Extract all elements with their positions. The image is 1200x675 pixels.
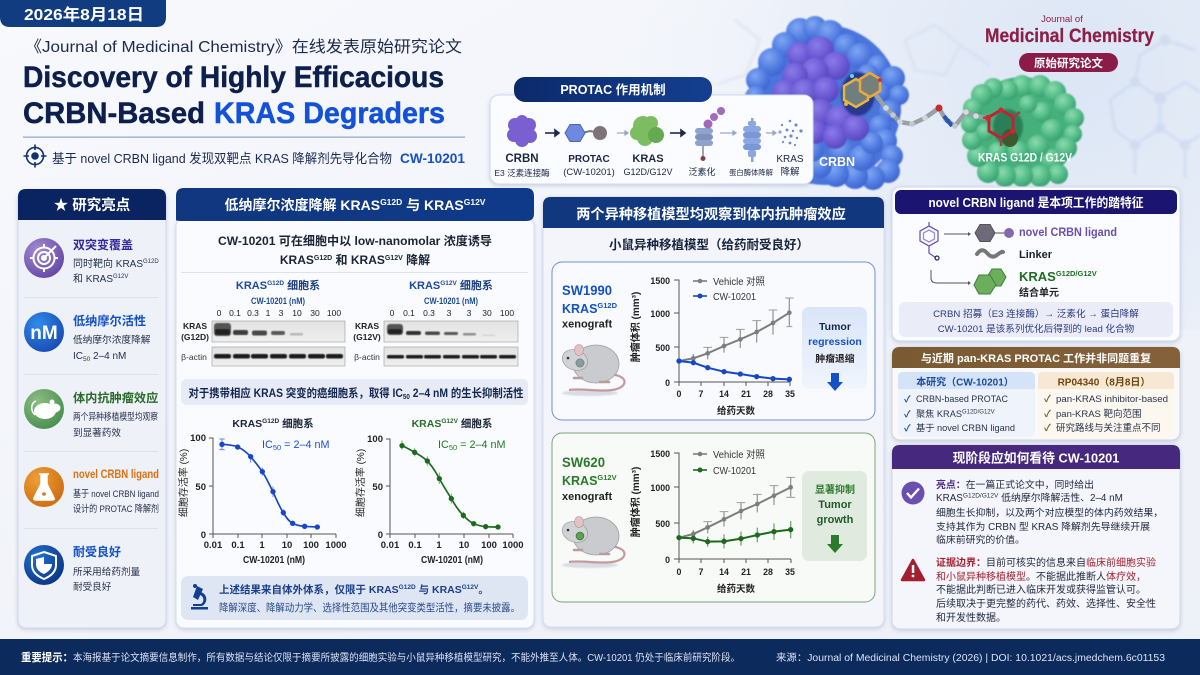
dose-response chart: G12D: KRAS xyxy=(232,418,262,430)
column: this study: G12D/G12V xyxy=(962,410,995,416)
dose-response chart: G12D: 0 xyxy=(201,530,206,541)
heading: degradation: G12V xyxy=(464,197,486,207)
highlights text: KRAS xyxy=(936,493,963,504)
heading: current stage: 现阶段应如何看待 CW-10201 xyxy=(953,450,1119,466)
mechanism labels: E3 泛素连接酶 xyxy=(494,168,550,178)
line chart: SW620 xyxy=(629,448,795,595)
in vitro scope note: 与 KRAS xyxy=(416,583,462,596)
evidence boundary text: 不能据此判断已进入临床开发或获得监管认可。 xyxy=(936,583,1146,596)
illustration: mouse xyxy=(559,344,624,396)
western blot: G12V: 0.1 xyxy=(403,308,415,318)
line chart: SW1990: 给药天数 xyxy=(717,405,755,417)
card: SW620 xyxy=(552,433,875,602)
evidence boundary text: 后续取决于更完整的药代、药效、选择性、安全性 xyxy=(936,597,1156,610)
3D structure: KRAS surface xyxy=(961,75,1084,187)
highlight 1: dual mutation coverage: G12V xyxy=(113,274,128,280)
column: RP04340: RP04340（8月8日） xyxy=(1058,376,1150,388)
date tab xyxy=(0,0,166,27)
icon: shield xyxy=(24,545,64,585)
western blot: G12D: 10 xyxy=(292,308,302,318)
model label: KRAS xyxy=(562,302,597,316)
main title xyxy=(23,61,445,130)
dose-response chart: G12D xyxy=(177,417,347,566)
dose-response chart: G12D: 细胞系 xyxy=(279,417,314,430)
line chart: SW1990: 1500 xyxy=(650,276,670,286)
column: RP04340: 研究路线与关注重点不同 xyxy=(1056,422,1161,434)
western blot: G12D: 细胞系 xyxy=(284,278,320,292)
column: this study: CRBN-based PROTAC xyxy=(916,394,1008,404)
line chart: SW620: 14 xyxy=(719,567,729,577)
dose-response chart: G12V: 1 xyxy=(436,540,442,551)
mechanism labels: CRBN xyxy=(505,153,539,165)
western blot: G12D: 0.3 xyxy=(247,308,259,318)
mechanism note xyxy=(899,302,1173,337)
dose-response chart: G12V xyxy=(354,417,524,566)
card: SW1990 xyxy=(552,262,875,420)
main title: CRBN-Based xyxy=(23,97,205,130)
heading: degradation xyxy=(176,188,534,221)
western blot: G12D: (G12D) xyxy=(181,332,209,342)
line chart: SW620: 肿瘤体积 (mm³) xyxy=(629,467,642,537)
column: RP04340 xyxy=(1038,372,1174,437)
badge: original paper xyxy=(1019,53,1118,72)
mechanism note: CRBN 招募（E3 连接酶）→ 泛素化 → 蛋白降解 xyxy=(933,308,1139,320)
icon: target xyxy=(24,144,46,168)
date tab: 2026年8月18日 xyxy=(24,5,144,24)
degradation summary: 和 KRAS xyxy=(332,252,385,267)
western blot: G12D: KRAS xyxy=(183,321,207,331)
in vitro scope note: G12V xyxy=(462,584,479,591)
mechanism labels: G12D/G12V xyxy=(623,167,673,177)
western blot: G12V: 30 xyxy=(482,308,492,318)
highlight 4: novel CRBN ligand xyxy=(24,467,159,515)
growth inhibition callout: 2–4 nM 的生长抑制活性 xyxy=(410,386,524,400)
icon: mouse xyxy=(24,389,64,429)
panel: comparison with pan-KRAS PROTAC xyxy=(892,347,1180,440)
dose-response chart: G12V: IC xyxy=(438,439,449,451)
journal announcement line: 《Journal of Medicinal Chemistry》在线发表原始研究论文 xyxy=(25,38,462,56)
highlight 2: low nanomolar activity: 低纳摩尔浓度降解 xyxy=(73,333,151,346)
highlight 5: well tolerated: 耐受良好 xyxy=(73,581,112,593)
western blot: G12V: β-actin xyxy=(354,352,380,362)
highlights text xyxy=(902,478,1163,546)
mechanism note: CW-10201 是该系列优化后得到的 lead 化合物 xyxy=(938,323,1135,335)
western blot: G12V: (G12V) xyxy=(353,332,381,342)
western blot: G12V: 100 xyxy=(500,308,514,318)
diagram labels: novel CRBN ligand xyxy=(1019,227,1117,239)
degradation summary: CW-10201 可在细胞中以 low-nanomolar 浓度诱导 xyxy=(218,233,492,248)
column: this study: 本研究（CW-10201） xyxy=(916,376,1014,388)
model label: SW620 xyxy=(562,454,605,470)
line chart: SW620: 28 xyxy=(763,567,773,577)
legend: Vehicle 对照 xyxy=(713,448,765,461)
highlight 1: dual mutation coverage: 和 KRAS xyxy=(73,274,113,285)
evidence boundary text: 和小鼠异种移植模型。不能据此推断人体疗效， xyxy=(936,570,1146,583)
in vitro scope note xyxy=(181,576,528,620)
highlight 1: dual mutation coverage: 同时靶向 KRAS xyxy=(73,259,143,270)
background molecular network xyxy=(715,20,1200,178)
model label: G12V xyxy=(597,473,617,482)
dose-response chart: G12V: = 2–4 nM xyxy=(457,439,505,451)
icon: CRBN blob xyxy=(507,115,537,147)
model label: xenograft xyxy=(562,318,612,330)
western blot: G12D: 0 xyxy=(217,308,222,318)
highlight 2: low nanomolar activity: 低纳摩尔活性 xyxy=(73,313,146,328)
western blot: G12V: CW-10201 (nM) xyxy=(424,296,478,306)
icon: flask xyxy=(24,467,64,507)
dose-response chart: G12V: 0.1 xyxy=(408,540,422,551)
western blot: G12D: 30 xyxy=(310,308,320,318)
icon: degraded fragments xyxy=(778,120,803,146)
dose-response chart: G12D: CW-10201 (nM) xyxy=(243,555,305,566)
icon: target xyxy=(24,238,64,278)
column: RP04340: ✓ xyxy=(1044,409,1051,420)
dose-response chart: G12D: = 2–4 nM xyxy=(281,439,329,451)
arrow: down xyxy=(827,535,843,553)
heading: degradation: 低纳摩尔浓度降解 KRAS xyxy=(225,197,380,213)
highlight 5: well tolerated xyxy=(24,544,141,593)
model label: G12D xyxy=(597,301,618,310)
column: RP04340: pan-KRAS 靶向范围 xyxy=(1056,408,1142,420)
growth inhibition callout: 对于携带相应 KRAS 突变的癌细胞系，取得 IC xyxy=(188,388,426,400)
subtitle with target icon: CW-10201 xyxy=(400,151,465,166)
panel: degradation at low nanomolar concentration xyxy=(176,188,534,628)
heading: comparison: 与近期 pan-KRAS PROTAC 工作并非同题重复 xyxy=(921,351,1151,365)
highlight 4: novel CRBN ligand: novel CRBN ligand xyxy=(73,469,159,481)
evidence boundary text: 证据边界：目前可核实的信息来自临床前细胞实验 xyxy=(936,556,1156,569)
highlight 2: low nanomolar activity: 50 xyxy=(83,356,91,363)
callout: tumor regression: 肿瘤退缩 xyxy=(815,352,855,365)
arrow xyxy=(545,130,559,136)
line chart: SW620: 7 xyxy=(699,567,704,577)
heading: current stage xyxy=(892,445,1180,469)
diagram: molecule schematic xyxy=(920,222,1014,294)
column: RP04340: pan-KRAS inhibitor-based xyxy=(1056,394,1168,405)
line chart: SW620: 21 xyxy=(741,567,751,577)
western blot: G12V: G12V xyxy=(440,280,458,287)
western blot: G12D: 3 xyxy=(279,308,284,318)
western blot: G12V: 细胞系 xyxy=(457,278,493,292)
callout: tumor growth suppression: 显著抑制 xyxy=(815,483,855,496)
arrow xyxy=(720,131,736,135)
heading: feature xyxy=(895,190,1177,214)
dose-response chart: G12V: CW-10201 (nM) xyxy=(421,555,483,566)
dose-response chart: G12D: 细胞存活率 (%) xyxy=(177,449,190,517)
model label: xenograft xyxy=(562,491,612,503)
callout: tumor regression: Tumor xyxy=(819,321,851,333)
highlight 1: dual mutation coverage: G12D xyxy=(143,259,159,265)
dose-response chart: G12V: 细胞存活率 (%) xyxy=(354,449,367,517)
model label xyxy=(562,454,617,503)
line chart: SW1990 xyxy=(629,275,795,417)
western blot: G12V: KRAS xyxy=(355,321,379,331)
line chart: SW620: 1500 xyxy=(650,449,670,459)
in vitro scope note: G12D xyxy=(399,584,416,591)
subtitle with target icon xyxy=(24,144,465,168)
heading: degradation: G12D xyxy=(380,197,402,207)
highlight 3: in vivo antitumor effect: 体内抗肿瘤效应 xyxy=(73,390,158,405)
footer xyxy=(0,639,1200,675)
dose-response chart: G12D: 50 xyxy=(195,482,206,493)
dose-response chart: G12V: 50 xyxy=(449,443,457,452)
footer: 本海报基于论文摘要信息制作，所有数据与结论仅限于摘要所披露的细胞实验与小鼠异种移植模型研究，不能外推至人体。CW-10201 仍处于临床前研究阶段。 xyxy=(73,651,740,664)
icon: check xyxy=(902,482,924,504)
icon: PROTAC xyxy=(565,124,607,142)
model label: KRAS xyxy=(562,474,597,488)
mechanism labels: KRAS xyxy=(632,153,664,165)
panel: research highlights xyxy=(18,189,166,628)
highlight 4: novel CRBN ligand: 基于 novel CRBN ligand xyxy=(73,488,159,500)
dose-response chart: G12D: 0.1 xyxy=(231,540,245,551)
journal logo xyxy=(985,14,1154,72)
line chart: SW620: 0 xyxy=(677,567,682,577)
dose-response chart: G12V: 100 xyxy=(481,540,497,551)
main title: KRAS Degraders xyxy=(214,97,445,130)
heading: highlights xyxy=(18,189,166,220)
western blot: G12V xyxy=(353,278,518,366)
heading: feature: novel CRBN ligand 是本项工作的踏特征 xyxy=(928,195,1144,210)
mechanism labels: 泛素化 xyxy=(688,166,716,177)
highlights text: 临床前研究的价值。 xyxy=(936,533,1025,546)
dose-response chart: G12D: G12D xyxy=(262,418,279,425)
heading: xenograft xyxy=(543,197,884,228)
western blot: G12V: 0 xyxy=(390,308,395,318)
badge: original paper: 原始研究论文 xyxy=(1034,56,1103,70)
diagram labels: 结合单元 xyxy=(1019,286,1059,299)
line chart: SW1990: 21 xyxy=(741,389,751,399)
subheading: mouse model: 小鼠异种移植模型（给药耐受良好） xyxy=(609,237,809,252)
diagram labels: G12D/G12V xyxy=(1056,269,1097,278)
dose-response chart: G12D: IC xyxy=(262,439,273,451)
3D structure: CRBN surface xyxy=(745,16,909,190)
legend: CW-10201 xyxy=(713,292,756,303)
heading: PROTAC xyxy=(514,77,712,102)
growth inhibition callout xyxy=(181,379,528,405)
panel: novel CRBN ligand feature xyxy=(892,187,1180,341)
callout: tumor growth suppression: growth xyxy=(817,514,854,526)
legend: Vehicle 对照 xyxy=(713,275,765,288)
dose-response chart: G12V: 0 xyxy=(378,530,383,541)
growth inhibition callout: 50 xyxy=(403,394,410,401)
mechanism labels xyxy=(494,153,804,178)
legend xyxy=(693,448,765,477)
western blot: G12V: 0.3 xyxy=(423,308,435,318)
column: this study: ✓ xyxy=(904,409,911,419)
western blot: G12D: G12D xyxy=(267,280,284,287)
western blot: G12D xyxy=(181,278,345,366)
journal logo: Journal of xyxy=(1041,14,1083,25)
evidence boundary text xyxy=(902,556,1156,624)
icon: microscope xyxy=(191,584,208,610)
icon: proteasome xyxy=(743,118,761,162)
western blot: G12V: 3 xyxy=(447,308,452,318)
line chart: SW1990: 28 xyxy=(763,389,773,399)
highlight 3: in vivo antitumor effect: 两个异种移植模型均观察 xyxy=(73,411,158,423)
column: RP04340: ✓ xyxy=(1044,423,1051,434)
main title: Discovery of Highly Efficacious xyxy=(23,61,444,94)
western blot: G12V: 3 xyxy=(467,308,472,318)
highlight 2: low nanomolar activity: 2–4 nM xyxy=(90,351,126,362)
heading: xenograft: 两个异种移植模型均观察到体内抗肿瘤效应 xyxy=(576,206,846,223)
journal logo: Medicinal Chemistry xyxy=(985,25,1154,47)
purple core lobes xyxy=(772,36,869,149)
highlight 2: low nanomolar activity xyxy=(24,312,151,363)
mechanism labels: 蛋白酶体降解 xyxy=(729,168,773,177)
arrow xyxy=(617,131,628,135)
highlights text: 支持其作为 CRBN 型 KRAS 降解剂先导继续开展 xyxy=(936,520,1150,533)
dose-response chart: G12V: 1000 xyxy=(502,540,524,551)
dose-response chart: G12D: 100 xyxy=(190,433,206,444)
highlight 5: well tolerated: 耐受良好 xyxy=(73,544,121,559)
subtitle with target icon: 基于 novel CRBN ligand 发现双靶点 KRAS 降解剂先导化合物 xyxy=(52,151,392,166)
icon: KRAS blob xyxy=(630,116,664,146)
icon: ubiquitination xyxy=(695,107,725,161)
highlights text: 低纳摩尔降解活性、2–4 nM xyxy=(998,491,1123,504)
highlight 1: dual mutation coverage: 双突变覆盖 xyxy=(73,237,133,252)
CRBN label: CRBN xyxy=(819,155,855,169)
footer: 重要提示： xyxy=(21,650,73,664)
legend xyxy=(693,275,765,303)
western blot: G12D: β-actin xyxy=(181,352,207,362)
highlight 4: novel CRBN ligand: 设计的 PROTAC 降解剂 xyxy=(73,503,159,515)
degradation summary xyxy=(218,233,492,267)
line chart: SW1990: 肿瘤体积 (mm³) xyxy=(629,292,642,362)
callout: tumor growth suppression: Tumor xyxy=(818,499,852,511)
in vitro scope note: 上述结果来自体外体系，仅限于 KRAS xyxy=(219,584,399,596)
dose-response chart: G12V: 100 xyxy=(367,434,383,445)
dose-response chart: G12V: KRAS xyxy=(412,418,441,430)
legend: CW-10201 xyxy=(713,466,756,477)
dose-response chart: G12V: 0.01 xyxy=(381,540,400,551)
western blot: G12D: 1 xyxy=(266,308,271,318)
column: this study xyxy=(898,372,1035,437)
line chart: SW1990: 0 xyxy=(665,378,670,388)
column: this study: ✓ xyxy=(904,394,911,404)
western blot: G12D: 100 xyxy=(327,308,341,318)
heading: comparison xyxy=(892,347,1180,368)
3D structure: degrader molecule xyxy=(844,73,1020,147)
callout: tumor growth suppression xyxy=(802,471,867,561)
dose-response chart: G12D: 1000 xyxy=(325,540,347,551)
green lobes xyxy=(961,75,1084,187)
degradation summary: 降解 xyxy=(403,252,430,267)
highlights text: G12D/G12V xyxy=(963,492,999,500)
column: RP04340: ✓ xyxy=(1044,394,1051,405)
blue lobes xyxy=(745,16,909,190)
diagram labels: Linker xyxy=(1019,249,1053,261)
mechanism labels: PROTAC xyxy=(568,154,610,165)
mechanism labels: KRAS xyxy=(776,154,804,165)
model label xyxy=(562,282,618,330)
degradation summary: G12V xyxy=(385,255,403,262)
degradation summary: G12D xyxy=(314,255,332,262)
line chart: SW1990: 1000 xyxy=(650,309,670,319)
heading: highlights: ★ 研究亮点 xyxy=(54,196,131,214)
line chart: SW620: 500 xyxy=(655,519,670,529)
footer: 来源：Journal of Medicinal Chemistry (2026) | DOI: 10.1021/acs.jmedchem.6c01153 xyxy=(776,651,1165,664)
callout: tumor regression xyxy=(802,307,867,391)
line chart: SW1990: 0 xyxy=(677,389,682,399)
heading: PROTAC: PROTAC 作用机制 xyxy=(560,82,666,97)
in vitro scope note: 。 xyxy=(478,584,489,596)
column: this study: 聚焦 KRAS xyxy=(916,409,962,419)
arrow xyxy=(670,130,685,136)
column: this study: ✓ xyxy=(904,423,911,433)
dose-response chart: G12V: 50 xyxy=(372,482,383,493)
dose-response chart: G12D: 0.01 xyxy=(204,540,223,551)
panel: how to view CW-10201 xyxy=(892,445,1180,629)
illustration: mouse xyxy=(559,516,624,568)
mechanism labels: (CW-10201) xyxy=(563,167,615,178)
line chart: SW620: 1000 xyxy=(650,483,670,493)
diagram labels: KRAS xyxy=(1019,269,1056,284)
in vitro scope note: 降解深度、降解动力学、选择性范围及其他突变类型活性，摘要未披露。 xyxy=(219,601,520,614)
western blot: G12D: KRAS xyxy=(236,280,267,292)
highlight 3: in vivo antitumor effect xyxy=(24,389,158,439)
line chart: SW1990: 14 xyxy=(719,389,729,399)
dose-response chart: G12V: 细胞系 xyxy=(458,417,492,430)
dose-response chart: G12V: 10 xyxy=(459,540,469,551)
highlights text: 细胞生长抑制，以及两个对应模型的体内药效结果， xyxy=(936,506,1163,519)
line chart: SW1990: 7 xyxy=(699,389,704,399)
degradation summary: KRAS xyxy=(280,253,314,267)
model label: SW1990 xyxy=(562,282,612,298)
highlight 1: dual mutation coverage xyxy=(24,237,159,285)
highlight 3: in vivo antitumor effect: 到显著药效 xyxy=(73,427,121,439)
line chart: SW1990: 35 xyxy=(785,389,795,399)
callout: tumor regression: regression xyxy=(808,336,862,348)
panel: PROTAC mechanism xyxy=(490,77,813,184)
dose-response chart: G12D: 100 xyxy=(303,540,319,551)
dose-response chart: G12D: 50 xyxy=(273,443,281,452)
column: this study: 基于 novel CRBN ligand xyxy=(916,422,1015,433)
line chart: SW620: 35 xyxy=(785,567,795,577)
dose-response chart: G12V: G12V xyxy=(441,418,459,425)
line chart: SW620: 0 xyxy=(665,555,670,565)
icon: warning xyxy=(902,560,924,580)
mechanism labels: 降解 xyxy=(780,166,800,178)
highlight 2: low nanomolar activity: IC xyxy=(73,351,83,362)
western blot: G12D: CW-10201 (nM) xyxy=(251,296,305,306)
highlight 5: well tolerated: 所采用给药剂量 xyxy=(73,566,141,578)
dose-response chart: G12D: 1 xyxy=(259,540,265,551)
highlights text: 亮点：在一篇正式论文中，同时给出 xyxy=(936,478,1094,491)
evidence boundary text: 和开发性数据。 xyxy=(936,611,1006,624)
diagram labels xyxy=(1019,227,1117,299)
KRAS label: KRAS G12D / G12V xyxy=(978,152,1072,164)
line chart: SW1990: 500 xyxy=(655,343,670,353)
icon: nM: nM xyxy=(30,323,58,344)
line chart: SW620: 给药天数 xyxy=(717,583,755,595)
arrow: down xyxy=(827,373,843,391)
dose-response chart: G12D: 10 xyxy=(282,540,292,551)
western blot: G12V: KRAS xyxy=(409,280,440,292)
arrow xyxy=(766,131,776,135)
heading: degradation: 与 KRAS xyxy=(402,197,464,213)
panel: xenograft models xyxy=(543,197,884,627)
western blot: G12D: 0.1 xyxy=(229,308,241,318)
